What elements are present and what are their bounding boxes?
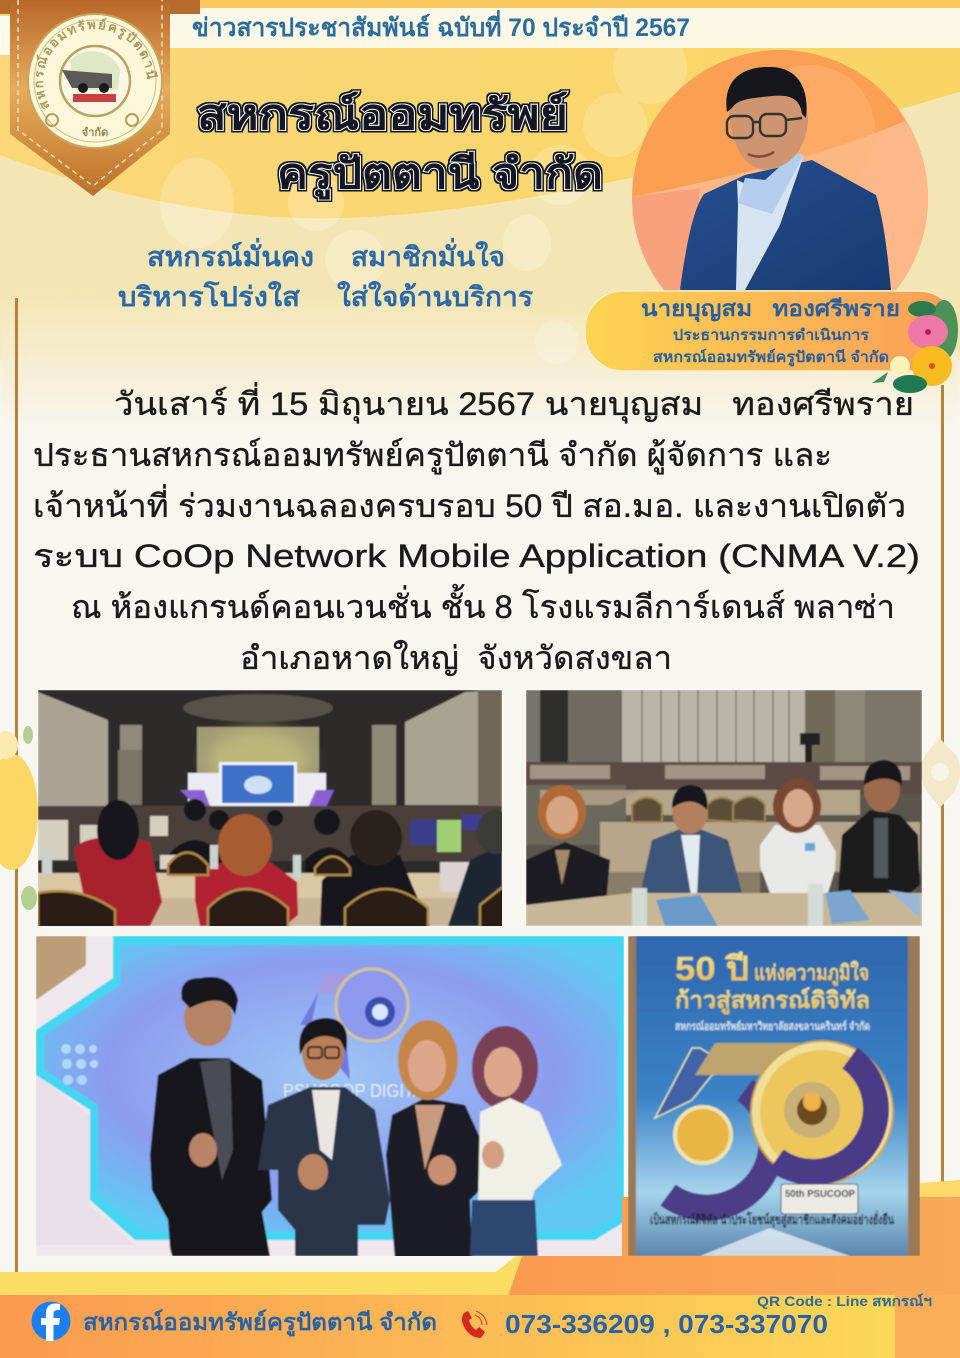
- woman in black jacket: [526, 785, 610, 912]
- man in grey blue jacket: [640, 785, 742, 895]
- face: [729, 70, 808, 170]
- woman in white shirt: [760, 779, 836, 893]
- woman in white polo: [470, 1026, 562, 1256]
- logo: circular seal: [27, 13, 163, 149]
- portrait of chairman in orange circle: [632, 50, 928, 290]
- line 1: วันเสาร์ ที่ 15 มิถุนายน 2567 นายบุญสม ทองศรีพราย: [114, 382, 914, 424]
- backdrop halftone dots: [61, 1044, 98, 1085]
- slogan: members: สมาชิกมั่นใจ: [351, 237, 505, 272]
- table row: [38, 873, 502, 898]
- black jacket attendee: [320, 855, 430, 926]
- phone numbers: 073-336209 , 073-337070: [505, 1309, 828, 1339]
- photo: group thumbs-up at 50th backdrop: [36, 936, 624, 1260]
- photo: anniversary book cover: [628, 936, 920, 1256]
- slogan: transparent: บริหารโปร่งใส: [118, 280, 301, 312]
- slogan: stable: สหกรณ์มั่นคง: [147, 237, 314, 272]
- facebook page name: สหกรณ์ออมทรัพย์ครูปัตตานี จำกัด: [83, 1309, 437, 1337]
- QR code caption: QR Code : Line สหกรณ์ฯ: [757, 1293, 932, 1309]
- top strip and title bar: [0, 0, 960, 55]
- line 6: อำเภอหาดใหญ่ จังหวัดสงขลา: [240, 640, 672, 676]
- front table: [526, 893, 922, 926]
- pride line: แห่งความภูมิใจ: [754, 960, 869, 987]
- slogan: service: ใส่ใจด้านบริการ: [337, 281, 534, 312]
- backdrop 50 logo: [300, 969, 408, 1080]
- main heading: [197, 91, 603, 200]
- logo: leaf emblem: [70, 51, 120, 90]
- left floral decoration: [0, 726, 38, 910]
- book headline: [675, 950, 870, 1015]
- man in black suit: [838, 760, 920, 893]
- logo: side ornaments: [46, 114, 138, 126]
- mid tables: [626, 790, 860, 815]
- book publisher: สหกรณ์ออมทรัพย์มหาวิทยาลัยสงขลานครินทร์ จำกัด: [675, 1020, 870, 1033]
- glasses: [727, 114, 802, 138]
- water bottles: [42, 845, 301, 879]
- tropical flowers corner: [872, 300, 958, 393]
- audience middle rows: [38, 806, 502, 861]
- icon: facebook: [32, 1302, 70, 1341]
- newsletter title: ข่าวสารประชาสัมพันธ์ ฉบับที่ 70 ประจำปี 2567: [192, 10, 690, 42]
- book 50 emblem: [655, 1041, 893, 1208]
- line 3: เจ้าหน้าที่ ร่วมงานฉลองครบรอบ 50 ปี สอ.มอ. และงานเปิดตัว: [33, 484, 906, 524]
- organisation line: สหกรณ์ออมทรัพย์ครูปัตตานี จำกัด: [653, 348, 889, 367]
- line 5: ณ ห้องแกรนด์คอนเวนชั่น ชั้น 8 โรงแรมลีการ์เดนส์ พลาซ่า: [71, 584, 895, 625]
- stage backdrop wings: [188, 773, 326, 808]
- backdrop headline: PSUCOOP DIGITAL: [283, 1081, 433, 1101]
- bubbles decoration: [160, 30, 687, 364]
- 50 years: 50 ปี: [675, 950, 749, 987]
- photo: conference hall audience: [38, 690, 513, 930]
- photo: four delegates seated at table: [526, 690, 922, 926]
- name plate: [585, 291, 957, 371]
- heading line 1: สหกรณ์ออมทรัพย์: [197, 91, 568, 138]
- shirt: [736, 155, 804, 290]
- man in black suit: [150, 977, 272, 1256]
- woman in black blazer: [386, 1020, 488, 1260]
- heading line 2: ครูปัตตานี จำกัด: [277, 150, 603, 200]
- panel side rules: [15, 298, 944, 1274]
- line 2: ประธานสหกรณ์ออมทรัพย์ครูปัตตานี จำกัด ผู้จัดการ และ: [33, 437, 832, 475]
- man in charcoal suit with glasses: [258, 1018, 390, 1256]
- mouth: [748, 152, 774, 157]
- digital line: ก้าวสู่สหกรณ์ดิจิทัล: [675, 987, 870, 1015]
- book coop badge: [781, 1184, 858, 1214]
- logo: bottom lettering: จำกัด: [82, 126, 108, 139]
- jacket: [680, 160, 891, 290]
- right Thai ornament: [921, 738, 960, 808]
- bottom orange and yellow blocks behind photos: [0, 1180, 960, 1300]
- logo: cannon on carriage: [62, 70, 116, 102]
- logo: ring lettering: สหกรณ์ออมทรัพย์ครูปัตตานี: [36, 18, 158, 110]
- body announcement text: [33, 382, 920, 676]
- line 4: ระบบ CoOp Network Mobile Application (CNMA V.2): [33, 538, 920, 574]
- long hair attendee: [195, 862, 298, 926]
- rear audience: [526, 762, 922, 794]
- gold banquet chairs: [38, 852, 505, 930]
- book badge label: 50th PSUCOOP: [785, 1189, 855, 1200]
- slogan: [118, 237, 534, 312]
- ribbon badge with co-op logo: [0, 0, 200, 196]
- collar: [738, 153, 804, 214]
- position line: ประธานกรรมการดำเนินการ: [673, 326, 870, 344]
- hair: [726, 67, 807, 118]
- header background: yellow field with cream wave: [0, 0, 960, 430]
- booklets and bottles: [656, 895, 718, 926]
- chairman name: นายบุญสม ทองศรีพราย: [641, 296, 900, 323]
- stage screen: [219, 762, 297, 806]
- icon: telephone: [462, 1311, 487, 1338]
- footer band: [0, 1295, 960, 1358]
- red shirt attendee: [74, 836, 162, 926]
- camera tripod: [800, 733, 820, 765]
